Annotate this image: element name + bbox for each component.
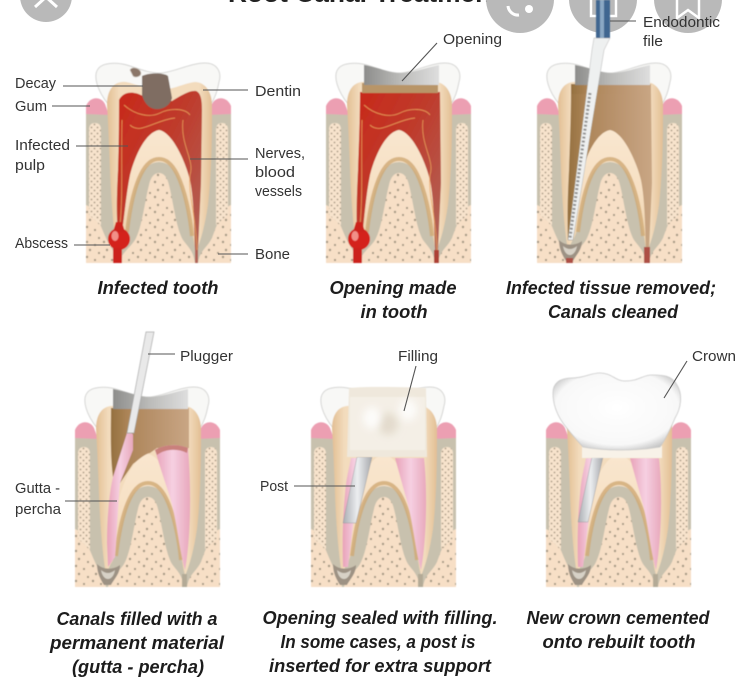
label: gutta-percha: Gutta -: [15, 480, 60, 497]
caption: new crown: [526, 608, 710, 652]
caption: infected tissue removed: [506, 278, 716, 322]
panel: new crown: [526, 348, 736, 652]
label: decay: [15, 75, 143, 92]
caption: opening sealed: inserted for extra support: [269, 656, 492, 676]
illustration: infected tooth: [86, 63, 231, 263]
filling: [347, 387, 427, 457]
label: infected pulp: pulp: [15, 157, 45, 174]
illustration: cleaned tooth: [537, 63, 682, 263]
illustration: sealed tooth: [311, 387, 456, 587]
label: post: [260, 478, 355, 495]
label: post: Post: [260, 478, 289, 495]
caption: infected tissue removed: Canals cleaned: [548, 302, 679, 322]
label: bone: Bone: [255, 246, 290, 263]
caption: canals filled: [49, 609, 225, 677]
label: opening: Opening: [443, 31, 502, 48]
label: crown: Crown: [692, 348, 736, 365]
label: gutta-percha: percha: [15, 501, 62, 518]
caption: new crown: onto rebuilt tooth: [542, 632, 696, 652]
panel: opening sealed: [260, 348, 498, 676]
label: plugger: [148, 348, 233, 365]
illustration: opened tooth: [326, 63, 471, 263]
label: abscess: [15, 235, 110, 252]
label: gutta-percha: [15, 480, 117, 518]
label: endodontic file: Endodontic: [643, 14, 721, 31]
label: nerves, blood vessels: [190, 145, 305, 200]
label: gum: Gum: [15, 98, 47, 115]
label: nerves, blood vessels: Nerves,: [255, 145, 305, 162]
caption: opening sealed: Opening sealed with filling.: [262, 608, 498, 628]
caption: opening sealed: In some cases, a post is: [280, 632, 476, 652]
caption: opening made: [330, 278, 456, 322]
label: bone: [218, 246, 290, 263]
panel: opening made: [326, 31, 502, 322]
caption: canals filled: permanent material: [49, 633, 225, 653]
icon: bookmark button: [654, 0, 722, 33]
label: filling: [398, 348, 438, 411]
label: nerves, blood vessels: vessels: [255, 183, 302, 200]
label: dentin: Dentin: [255, 83, 301, 100]
illustration: filled tooth: [75, 387, 220, 587]
label: endodontic file: [610, 14, 721, 50]
icon: close button: [20, 0, 72, 22]
label: gum: [15, 98, 90, 115]
label: infected pulp: [15, 137, 128, 174]
caption: canals filled: Canals filled with a: [56, 609, 218, 629]
label: crown: [664, 348, 736, 398]
label: decay: Decay: [15, 75, 56, 92]
icon: plugger: [127, 332, 154, 433]
icon: search button: [486, 0, 554, 33]
caption: canals filled: (gutta - percha): [72, 657, 204, 677]
label: endodontic file: file: [643, 33, 663, 50]
label: filling: Filling: [398, 348, 438, 365]
icon: share button: [569, 0, 637, 33]
panel: canals filled: [15, 332, 233, 677]
icon: endodontic file: [568, 0, 610, 240]
crown: [553, 373, 681, 458]
illustration: crowned tooth: [546, 406, 691, 587]
panel: infected tooth: [15, 63, 305, 298]
label: plugger: Plugger: [180, 348, 233, 365]
caption: opening made: Opening made: [330, 278, 456, 298]
label: abscess: Abscess: [15, 235, 68, 252]
label: opening: [402, 31, 502, 81]
caption: opening made: in tooth: [360, 302, 428, 322]
label: dentin: [203, 83, 301, 100]
panel: canals cleaned: [506, 0, 721, 322]
caption: new crown: New crown cemented: [526, 608, 710, 628]
caption: infected tooth: Infected tooth: [98, 278, 218, 298]
caption: infected tissue removed: Infected tissue removed;: [506, 278, 716, 298]
caption: opening sealed: [262, 608, 498, 676]
label: infected pulp: Infected: [15, 137, 70, 154]
label: nerves, blood vessels: blood: [255, 164, 295, 181]
